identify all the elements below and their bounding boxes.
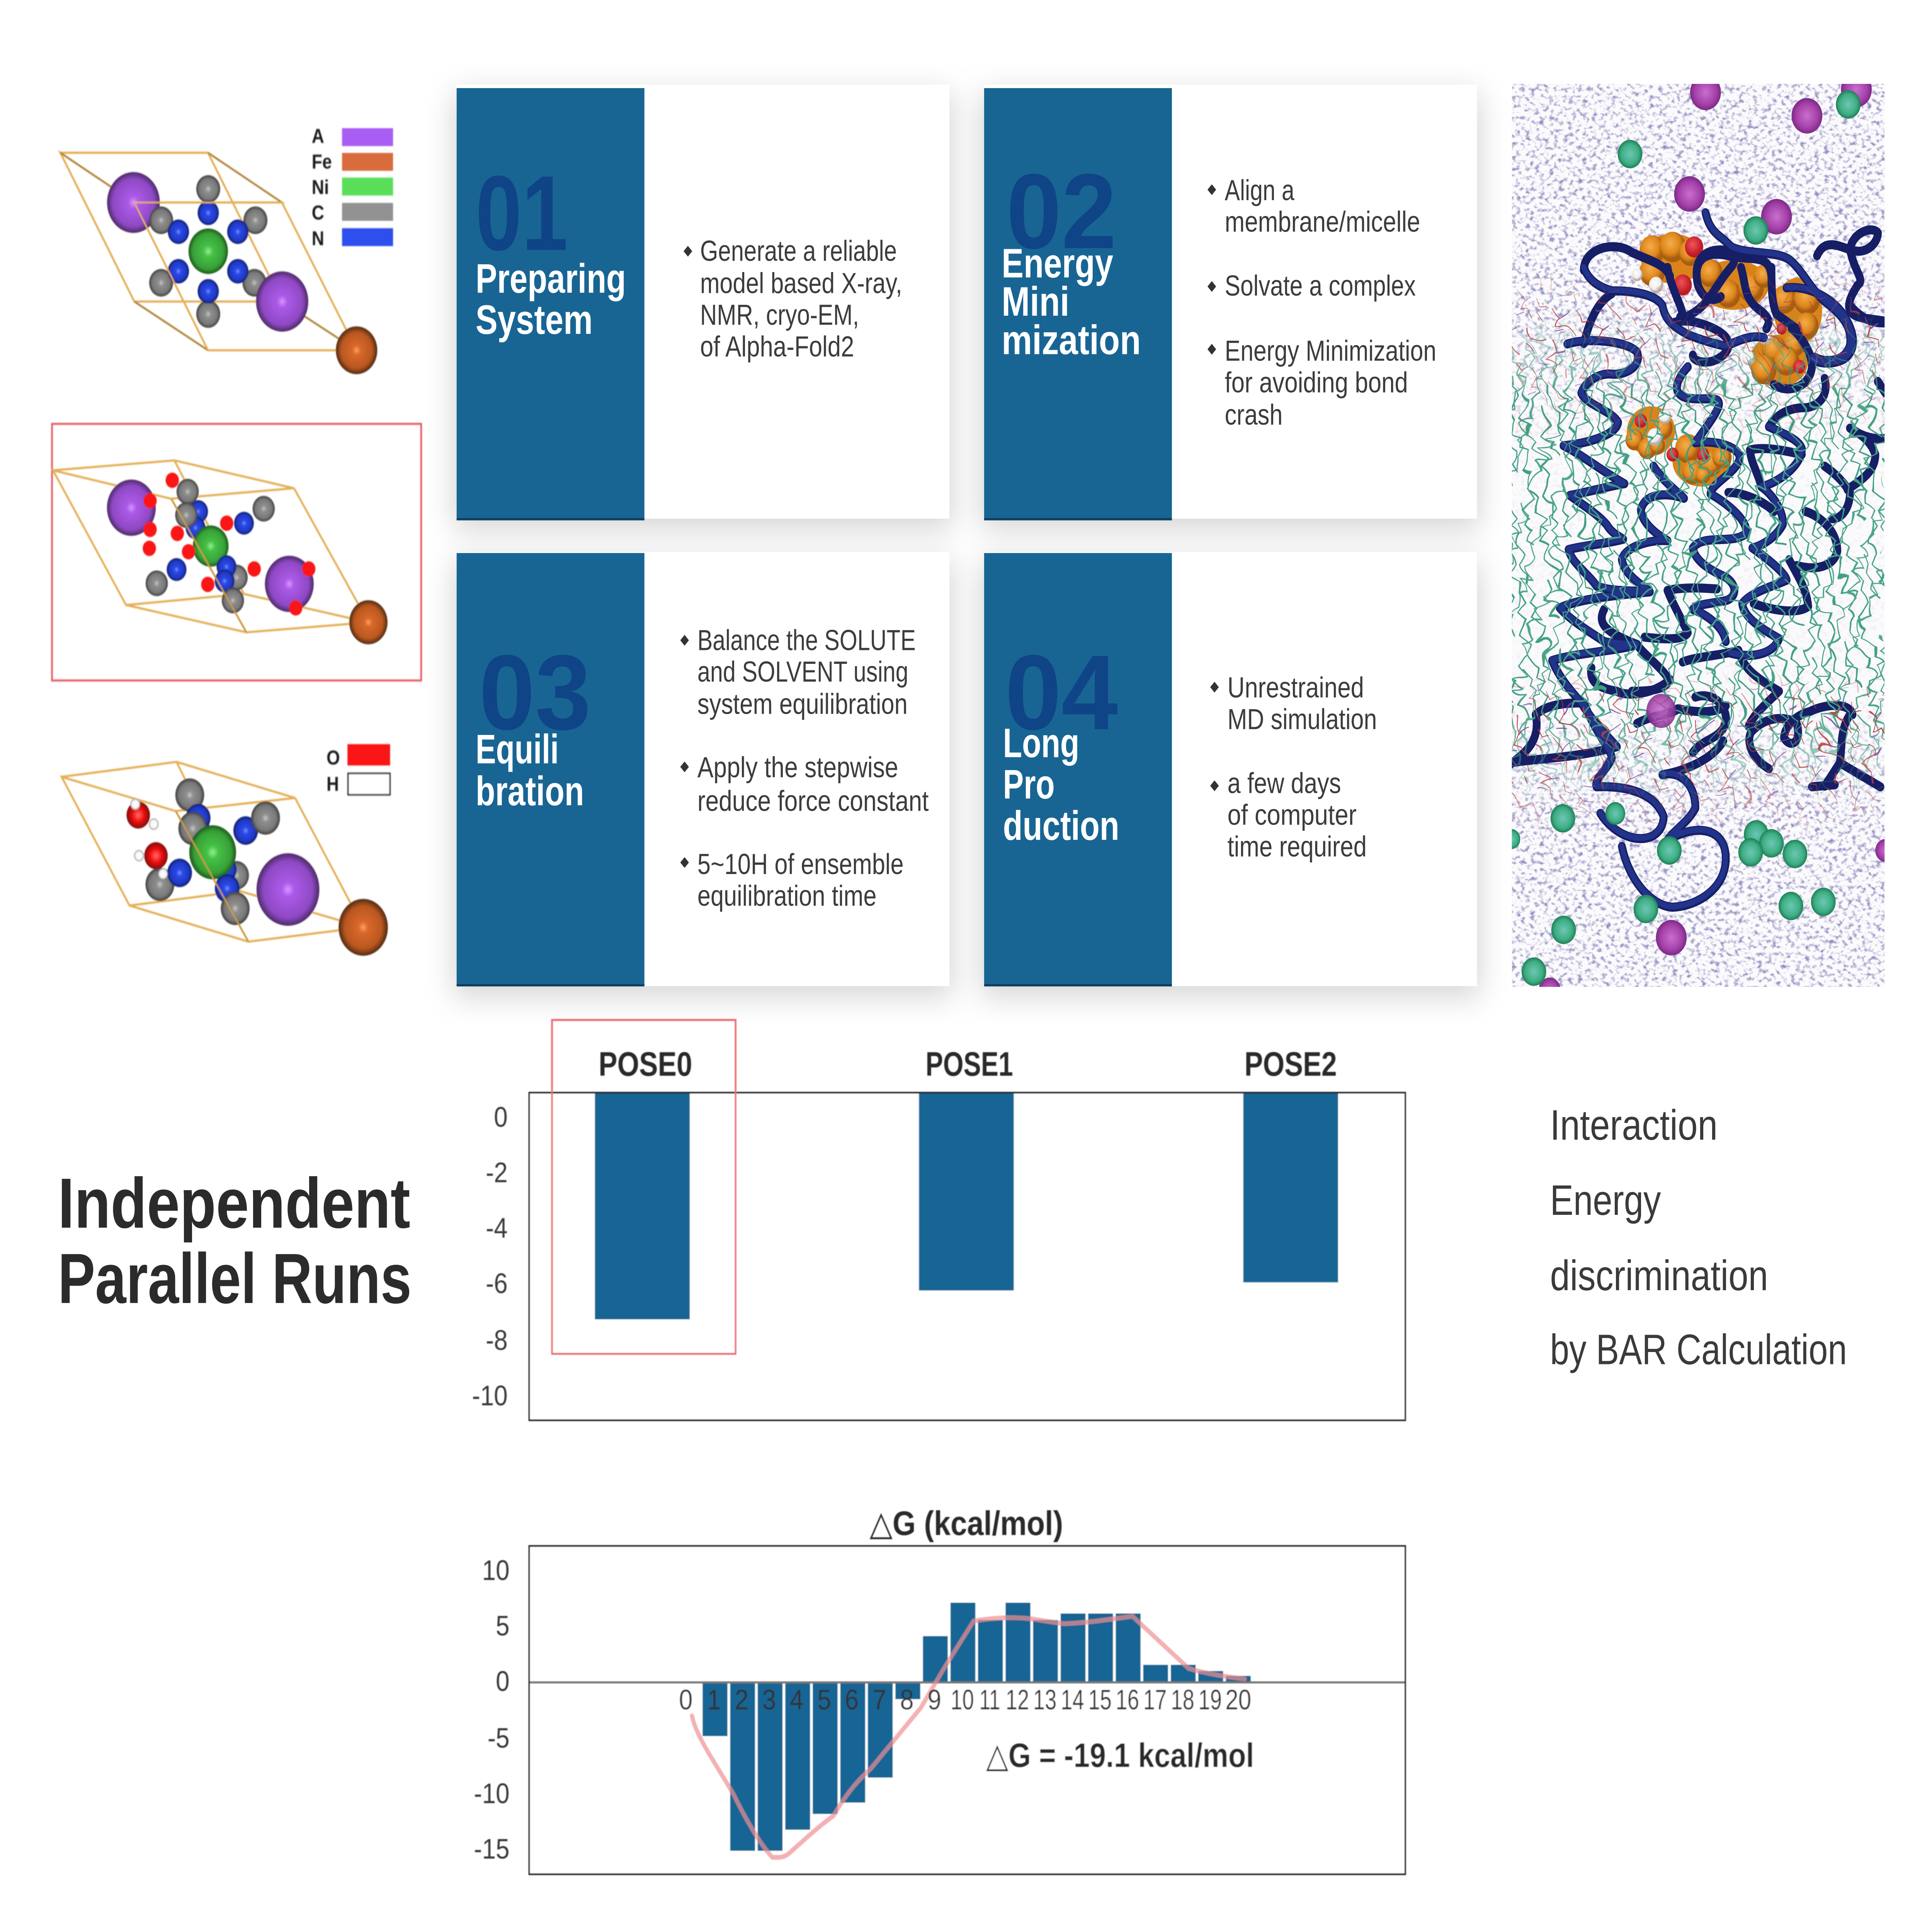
- chart title: △G (kcal/mol): [870, 1504, 1063, 1543]
- y axis labels: -2: [486, 1156, 508, 1189]
- heading: Long: [1003, 721, 1079, 766]
- bullet text: for avoiding bond: [1225, 366, 1408, 399]
- bullet text: [684, 235, 902, 363]
- x axis labels: 17: [1143, 1684, 1167, 1716]
- trend line: [692, 1616, 1245, 1857]
- panel: crystal structures: [52, 125, 421, 956]
- x axis labels: 15: [1088, 1684, 1112, 1716]
- number 03: 03: [479, 633, 591, 752]
- delta G annotation: △G = -19.1 kcal/mol: [986, 1736, 1254, 1774]
- panel 02: energy minimization: [984, 85, 1477, 520]
- x axis labels: 6: [845, 1684, 859, 1716]
- x axis labels: 10: [951, 1684, 974, 1716]
- side caption: [1550, 1101, 1847, 1373]
- molecule: pristine cell: [60, 153, 377, 374]
- bullet text: [680, 624, 929, 912]
- heading: Energy: [1002, 241, 1113, 286]
- number 01: 01: [476, 153, 568, 273]
- heading: bration: [476, 769, 584, 814]
- bullet text: of Alpha-Fold2: [700, 330, 854, 363]
- title: [58, 1164, 412, 1318]
- legend: elements: N: [312, 227, 324, 250]
- green ions: [1503, 90, 1861, 986]
- legend: elements: [312, 125, 393, 250]
- title: Independent: [58, 1164, 410, 1243]
- y axis labels: [472, 1101, 508, 1412]
- x axis labels: 20: [1225, 1684, 1251, 1716]
- bullet text: membrane/micelle: [1225, 205, 1420, 238]
- legend: elements: Fe: [312, 151, 332, 173]
- bullet text: MD simulation: [1228, 703, 1377, 735]
- bullet text: Generate a reliable: [700, 235, 897, 267]
- y axis labels: [474, 1554, 510, 1865]
- bars: [702, 1603, 1251, 1851]
- bullet text: [1208, 173, 1436, 431]
- plot frame: [529, 1093, 1405, 1420]
- x axis labels: 18: [1171, 1684, 1194, 1716]
- number 02: 02: [1006, 151, 1117, 271]
- heading: duction: [1003, 803, 1119, 849]
- panel 01: preparing system: [457, 85, 949, 520]
- bullet text: reduce force constant: [697, 784, 929, 817]
- heading: [1003, 721, 1119, 849]
- legend: oxygen and hydrogen: H: [327, 773, 339, 795]
- bullet text: Solvate a complex: [1225, 269, 1416, 302]
- panel: membrane protein simulation box: [1512, 84, 1885, 987]
- legend: oxygen and hydrogen: [327, 744, 390, 795]
- bullet text: Align a: [1225, 173, 1294, 206]
- y axis labels: 0: [496, 1665, 510, 1697]
- y axis labels: -10: [472, 1380, 508, 1412]
- bullet text: of computer: [1228, 798, 1357, 831]
- bullet text: a few days: [1228, 767, 1341, 799]
- x axis labels: 14: [1061, 1684, 1084, 1716]
- ligands: [1626, 232, 1822, 486]
- y axis labels: 10: [482, 1554, 510, 1586]
- x axis labels: 2: [735, 1684, 748, 1716]
- zero line: [530, 1682, 1405, 1683]
- bullet text: 5~10H of ensemble: [697, 848, 904, 880]
- pose labels: POSE1: [925, 1045, 1013, 1083]
- solvent noise: [1512, 84, 1884, 987]
- title: Parallel Runs: [58, 1239, 412, 1318]
- x axis labels: [679, 1684, 1251, 1716]
- x axis labels: 19: [1198, 1684, 1222, 1716]
- bullet text: system equilibration: [697, 687, 908, 720]
- y axis labels: -10: [474, 1777, 510, 1810]
- number 04: 04: [1005, 633, 1119, 752]
- y axis labels: -4: [486, 1212, 508, 1244]
- chart: interaction energy by pose: [472, 1020, 1405, 1420]
- bullet text: NMR, cryo-EM,: [700, 298, 859, 331]
- legend: elements: C: [312, 202, 324, 224]
- x axis labels: 4: [790, 1684, 804, 1716]
- heading: [476, 726, 584, 814]
- card shadows: [453, 94, 1480, 996]
- highlight box: [552, 1020, 736, 1354]
- x axis labels: 8: [900, 1684, 914, 1716]
- plot frame: [529, 1546, 1405, 1874]
- heading: Mini: [1002, 279, 1070, 325]
- bars: [595, 1094, 1338, 1319]
- bullet text: Balance the SOLUTE: [697, 624, 916, 656]
- side caption: discrimination: [1550, 1252, 1768, 1299]
- red selection box: [52, 424, 421, 680]
- legend: oxygen and hydrogen: O: [327, 747, 340, 769]
- bullet text: time required: [1228, 830, 1367, 862]
- pose labels: POSE2: [1245, 1045, 1337, 1083]
- heading: [1002, 241, 1141, 363]
- y axis labels: 0: [494, 1101, 508, 1133]
- legend: elements: Ni: [312, 176, 329, 199]
- y axis labels: -6: [486, 1267, 508, 1299]
- heading: Equili: [476, 726, 559, 772]
- side caption: Energy: [1550, 1177, 1661, 1224]
- x axis labels: 12: [1006, 1684, 1029, 1716]
- x axis labels: 1: [707, 1684, 721, 1716]
- x axis labels: 3: [762, 1684, 776, 1716]
- bullet text: and SOLVENT using: [697, 655, 908, 688]
- x axis labels: 5: [818, 1684, 831, 1716]
- side caption: by BAR Calculation: [1550, 1326, 1847, 1373]
- chart: delta G profile: [474, 1504, 1405, 1874]
- heading: mization: [1002, 317, 1141, 363]
- molecule: oxygen adsorbed cell: [53, 460, 388, 644]
- y axis labels: -5: [488, 1722, 510, 1754]
- heading: System: [476, 297, 593, 343]
- y axis labels: -8: [486, 1324, 508, 1356]
- bullet text: crash: [1225, 398, 1283, 431]
- bullet text: [1210, 671, 1377, 862]
- bullet text: Unrestrained: [1228, 671, 1364, 704]
- heading: Pro: [1003, 762, 1055, 808]
- x axis labels: 9: [928, 1684, 941, 1716]
- y axis labels: 5: [496, 1610, 510, 1642]
- pose labels: [599, 1045, 1337, 1083]
- x axis labels: 16: [1116, 1684, 1139, 1716]
- pose labels: POSE0: [599, 1045, 692, 1083]
- y axis labels: -15: [474, 1833, 510, 1865]
- bullet text: Apply the stepwise: [697, 751, 898, 784]
- bullet text: model based X-ray,: [700, 267, 902, 299]
- purple ions: [1539, 72, 1895, 1003]
- heading: [476, 256, 626, 343]
- side caption: Interaction: [1550, 1101, 1718, 1149]
- panel 04: long production: [984, 552, 1477, 986]
- x axis labels: 13: [1033, 1684, 1056, 1716]
- protein ribbon: [1510, 212, 1886, 907]
- heading: Preparing: [476, 256, 626, 302]
- lipid tails: [1491, 270, 1885, 838]
- x axis labels: 11: [979, 1684, 1000, 1716]
- x axis labels: 7: [872, 1684, 886, 1716]
- legend: elements: A: [312, 125, 324, 147]
- lipid head groups: [1491, 270, 1885, 838]
- x axis labels: 0: [679, 1684, 693, 1716]
- molecule: water adsorbed cell: [61, 762, 388, 956]
- panel 03: equilibration: [457, 552, 949, 986]
- bullet text: equilibration time: [697, 879, 876, 912]
- bullet text: Energy Minimization: [1225, 334, 1436, 367]
